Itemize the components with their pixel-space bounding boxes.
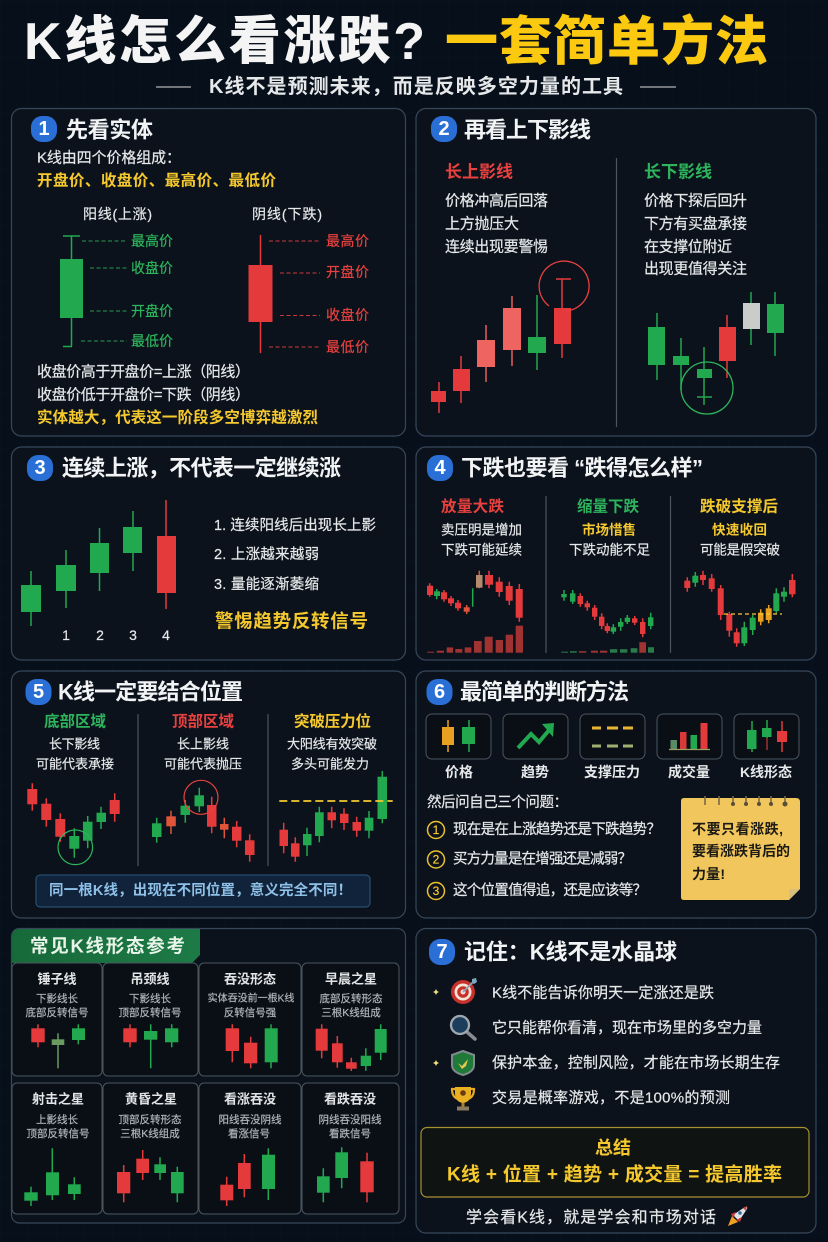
chart: candles 1-4: 3 <box>129 627 137 643</box>
chart: breakout <box>279 771 393 862</box>
panel: 7 记住 <box>416 928 816 1233</box>
green candle diagram: 开盘价 <box>131 303 173 319</box>
column: lower shadow text: 在支撑位附近 <box>644 238 732 256</box>
icon: 趋势: 趋势 <box>521 764 549 780</box>
card: 看涨吞没 <box>199 1083 301 1214</box>
panel: 常见K线形态参考 <box>12 928 406 1223</box>
closing line: 学会看K线，就是学会和市场对话 <box>466 1208 716 1226</box>
list: 2. 上涨越来越弱 <box>214 546 319 563</box>
icon: 趋势 <box>503 714 568 780</box>
sticky note: 要看涨跌背后的 <box>692 843 790 859</box>
chart: bottom zone <box>27 783 120 865</box>
badge 7 <box>429 939 455 965</box>
column: 缩量下跌: 市场惜售 <box>582 522 636 538</box>
mini chart: false break <box>684 571 796 647</box>
chart: long upper shadow <box>431 261 589 413</box>
row 2 <box>451 1016 762 1039</box>
heading: 连续上涨，不代表一定继续涨 <box>62 456 341 480</box>
column: 缩量下跌 <box>569 496 650 558</box>
column: 放量大跌: 放量大跌 <box>441 498 504 516</box>
badge 4: 4 <box>434 457 446 479</box>
yellow note: 实体越大，代表这一阶段多空博弈越激烈 <box>37 408 318 426</box>
card: 早晨之星 <box>302 963 399 1076</box>
warning: 警惕趋势反转信号 <box>215 610 368 632</box>
icon: 支撑压力: 支撑压力 <box>584 764 640 780</box>
chart: long lower shadow <box>648 292 784 414</box>
rule: down: 收盘价低于开盘价=下跌（阴线） <box>37 386 250 404</box>
card: 早晨之星: 三根K线组成 <box>321 1006 381 1019</box>
badge 5: 5 <box>33 681 44 703</box>
list: 3. 量能逐渐萎缩 <box>214 576 319 593</box>
card: 看涨吞没: 看涨信号 <box>228 1127 270 1140</box>
summary box: K线 + 位置 + 趋势 + 成交量 = 提高胜率 <box>447 1162 782 1186</box>
chart: candles 1-4: 2 <box>96 627 104 643</box>
red candle diagram: 收盘价 <box>326 307 369 323</box>
heading: 最简单的判断方法 <box>460 680 629 704</box>
badge 3: 3 <box>34 457 46 479</box>
icon: 价格: 价格 <box>445 764 473 780</box>
column: upper shadow text: 上方抛压大 <box>445 216 519 232</box>
chart: candles 1-4: 4 <box>162 627 170 643</box>
column: lower shadow text: 长下影线 <box>644 162 712 182</box>
column: 跌破支撑后: 快速收回 <box>712 522 767 538</box>
callout <box>36 875 370 907</box>
questions heading: 然后问自己三个问题： <box>427 794 568 811</box>
row 1 <box>433 978 714 1004</box>
card: 吞没形态: 吞没形态 <box>224 972 276 986</box>
chart: candles 1-4 <box>21 500 176 643</box>
column: 突破压力位: 突破压力位 <box>294 712 371 730</box>
red candle diagram: 开盘价 <box>326 264 369 280</box>
panel: 4 下跌也要看 <box>416 447 816 660</box>
column: 跌破支撑后 <box>700 498 780 558</box>
question 2: 2 <box>433 852 440 866</box>
card: 黄昏之星 <box>103 1083 198 1214</box>
row 2: 它只能帮你看清，现在市场里的多空力量 <box>492 1018 762 1036</box>
sticky note <box>681 796 800 900</box>
column: 缩量下跌: 缩量下跌 <box>577 496 639 516</box>
badge 2 <box>431 116 457 142</box>
card: 吞没形态: 实体吞没前一根K线 <box>208 992 294 1004</box>
column: 放量大跌 <box>441 498 522 558</box>
sticky note: 力量! <box>692 866 725 882</box>
card: 吞没形态: 反转信号强 <box>224 1006 277 1019</box>
card: 看跌吞没: 看跌吞没 <box>324 1092 376 1106</box>
card: 黄昏之星: 黄昏之星 <box>125 1092 177 1106</box>
row 1: K线不能告诉你明天一定涨还是跌 <box>492 984 714 1002</box>
panel: 3 连续上涨 <box>12 447 406 660</box>
question 3: 3 <box>433 884 440 898</box>
card: 射击之星: 射击之星 <box>32 1092 84 1106</box>
red candle diagram: 最低价 <box>326 339 369 355</box>
sticky note: 不要只看涨跌, <box>692 821 783 837</box>
row 4 <box>452 1087 730 1110</box>
column: 突破压力位 <box>287 712 377 772</box>
badge 6: 6 <box>434 681 445 703</box>
icon: 价格 <box>426 714 491 780</box>
panel: 5 K线一定要结合位置 <box>12 671 406 918</box>
card: 吊颈线: 顶部反转信号 <box>118 1006 182 1019</box>
card: 锤子线: 底部反转信号 <box>26 1006 88 1019</box>
card: 锤子线: 下影线长 <box>36 992 78 1005</box>
subtitle: K线不是预测未来，而是反映多空力量的工具 <box>209 75 623 98</box>
question 3: 这个位置值得追，还是应该等？ <box>453 881 647 899</box>
card: 黄昏之星: 顶部反转形态 <box>118 1113 182 1126</box>
card: 黄昏之星: 三根K线组成 <box>120 1127 180 1140</box>
column: 放量大跌: 下跌可能延续 <box>441 542 522 558</box>
title <box>24 12 768 72</box>
column: lower shadow text: 出现更值得关注 <box>644 260 747 278</box>
card: 看跌吞没: 看跌信号 <box>329 1127 371 1140</box>
question 1: 1 <box>433 823 440 837</box>
red candle diagram: 最高价 <box>326 233 369 249</box>
panel: 6 最简单的判断方法 <box>416 671 816 918</box>
icon: K线形态 <box>734 714 799 780</box>
icon: rocket <box>728 1206 747 1226</box>
heading: 记住：K线不是水晶球 <box>464 940 677 964</box>
column: 缩量下跌: 下跌动能不足 <box>569 542 650 558</box>
card: 吊颈线 <box>103 963 198 1076</box>
question 2: 买方力量是在增强还是减弱？ <box>453 850 632 868</box>
tab heading <box>12 929 200 963</box>
list <box>214 517 376 593</box>
label: 阳线: 阳线(上涨) <box>83 206 152 222</box>
icon: K线形态: K线形态 <box>740 764 792 780</box>
badge 1 <box>31 116 57 142</box>
card: 射击之星 <box>12 1083 102 1214</box>
icon: 成交量: 成交量 <box>668 764 710 780</box>
card: 吞没形态 <box>199 963 301 1076</box>
title: 一套简单方法 <box>445 12 768 72</box>
column: upper shadow text: 连续出现要警惕 <box>445 238 548 256</box>
panel: 1 先看实体 <box>12 108 406 436</box>
badge 7: 7 <box>436 941 448 963</box>
summary box <box>421 1128 809 1197</box>
badge 6 <box>426 679 452 705</box>
heading: K线一定要结合位置 <box>58 680 243 704</box>
green candle diagram: 最低价 <box>131 333 173 349</box>
column: 顶部区域 <box>164 712 242 772</box>
label: 阴线: 阴线(下跌) <box>252 206 322 222</box>
green candle diagram: 收盘价 <box>131 260 173 276</box>
column: 放量大跌: 卖压明是增加 <box>441 522 522 538</box>
column: lower shadow text: 下方有买盘承接 <box>644 214 747 232</box>
tab heading: 常见K线形态参考 <box>30 936 185 956</box>
rule: up: 收盘价高于开盘价=上涨（阳线） <box>37 362 250 380</box>
green candle diagram <box>60 233 173 349</box>
card: 看涨吞没: 阳线吞没阴线 <box>218 1113 282 1126</box>
heading: 再看上下影线 <box>464 118 591 142</box>
column: 底部区域: 底部区域 <box>44 712 106 730</box>
card: 锤子线: 锤子线 <box>37 972 77 986</box>
mini chart: high-volume drop <box>427 571 523 653</box>
heading: 先看实体 <box>66 118 153 142</box>
card: 吊颈线: 下影线长 <box>129 992 171 1005</box>
row 3 <box>433 1051 780 1075</box>
list: 1. 连续阳线后出现长上影 <box>214 517 376 534</box>
card: 看跌吞没 <box>302 1083 399 1214</box>
column: 突破压力位: 多头可能发力 <box>291 756 369 772</box>
column: lower shadow text: 价格下探后回升 <box>644 192 747 210</box>
column: 顶部区域: 长上影线 <box>177 736 229 752</box>
badge 4 <box>427 455 453 481</box>
card: 射击之星: 上影线长 <box>36 1113 78 1126</box>
row 4: 交易是概率游戏，不是100%的预测 <box>492 1088 730 1106</box>
chart: candles 1-4: 1 <box>62 627 70 643</box>
icon: 成交量 <box>657 714 722 780</box>
title: K线怎么看涨跌? <box>24 13 425 71</box>
column: upper shadow text <box>445 162 548 256</box>
card: 早晨之星: 底部反转形态 <box>320 992 383 1005</box>
badge 2: 2 <box>438 118 450 140</box>
column: 突破压力位: 大阳线有效突破 <box>287 736 377 752</box>
card: 看涨吞没: 看涨吞没 <box>224 1092 276 1106</box>
badge 3 <box>27 455 53 481</box>
row 3: 保护本金，控制风险，才能在市场长期生存 <box>492 1054 780 1072</box>
icon: 支撑压力 <box>580 714 645 780</box>
card: 看跌吞没: 阴线吞没阳线 <box>318 1113 382 1126</box>
panel: 2 再看上下影线 <box>416 108 816 436</box>
heading: 下跌也要看 “跌得怎么样” <box>461 456 703 480</box>
column: 跌破支撑后: 跌破支撑后 <box>700 498 778 516</box>
badge 1: 1 <box>38 118 50 140</box>
chart: top zone <box>152 780 254 862</box>
question 1: 现在是在上涨趋势还是下跌趋势？ <box>453 821 661 838</box>
summary box: 总结 <box>595 1138 631 1158</box>
column: 顶部区域: 顶部区域 <box>172 712 234 730</box>
card: 早晨之星: 早晨之星 <box>325 972 377 986</box>
mini chart: low-volume drop <box>561 590 654 653</box>
column: 跌破支撑后: 可能是假突破 <box>700 542 780 558</box>
column: 底部区域: 可能代表承接 <box>36 756 114 772</box>
card: 射击之星: 顶部反转信号 <box>26 1127 90 1140</box>
callout: 同一根K线，出现在不同位置，意义完全不同！ <box>49 881 352 899</box>
column: 底部区域 <box>36 712 114 772</box>
badge 5 <box>26 679 52 705</box>
intro text: K线由四个价格组成： <box>37 150 181 166</box>
column: 顶部区域: 可能代表抛压 <box>164 756 242 772</box>
card: 锤子线 <box>12 963 102 1076</box>
column: lower shadow text <box>644 162 747 278</box>
card: 吊颈线: 吊颈线 <box>130 972 170 986</box>
column: upper shadow text: 价格冲高后回落 <box>445 192 548 210</box>
red candle diagram <box>248 233 369 355</box>
column: 底部区域: 长下影线 <box>49 736 100 752</box>
green candle diagram: 最高价 <box>131 233 173 249</box>
four prices: 开盘价、收盘价、最高价、最低价 <box>37 170 276 190</box>
column: upper shadow text: 长上影线 <box>445 162 513 182</box>
